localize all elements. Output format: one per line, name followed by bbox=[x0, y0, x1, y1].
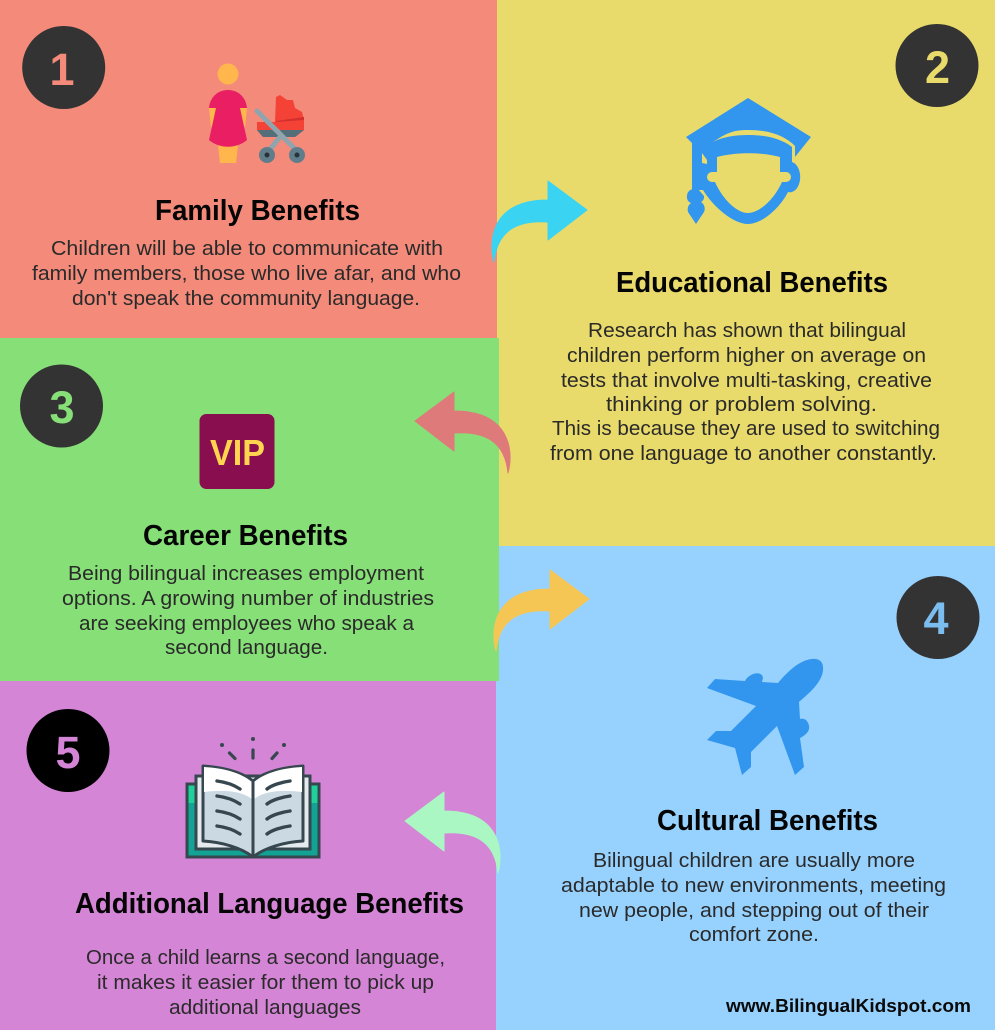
number badge 2: 2 bbox=[925, 42, 950, 93]
text: career benefits description: are seeking employees who speak a bbox=[79, 612, 415, 635]
icon: graduate head with cap bbox=[686, 98, 811, 224]
text: career benefits description: second language. bbox=[165, 636, 328, 659]
number badge 3 bbox=[20, 364, 103, 448]
heading: family benefits: Family Benefits bbox=[155, 195, 360, 227]
text: educational benefits description: tests that involve multi-tasking, creative bbox=[561, 369, 932, 392]
panel: career benefits content bbox=[20, 364, 434, 659]
number badge 3: 3 bbox=[49, 382, 75, 433]
text: additional language benefits description bbox=[86, 946, 445, 1019]
icon: VIP badge: VIP bbox=[210, 432, 265, 473]
arrow: cultural to additional language bbox=[405, 792, 500, 873]
panel: educational benefits content bbox=[550, 24, 978, 465]
text: career benefits description bbox=[62, 562, 434, 659]
text: educational benefits description: from one language to another constantly. bbox=[550, 442, 937, 465]
heading: career benefits: Career Benefits bbox=[143, 520, 348, 552]
text: educational benefits description: This is because they are used to switching bbox=[552, 417, 940, 440]
text: family benefits description: Children will be able to communicate with bbox=[51, 237, 443, 260]
panel: cultural benefits background bbox=[495, 546, 995, 1030]
arrow: educational to career bbox=[415, 392, 510, 473]
heading: educational benefits: Educational Benefits bbox=[616, 267, 888, 299]
text: family benefits description bbox=[32, 237, 461, 310]
heading: additional language benefits: Additional Language Benefits bbox=[75, 888, 464, 920]
number badge 5: 5 bbox=[55, 727, 81, 778]
panel: educational benefits background bbox=[497, 0, 995, 546]
text: cultural benefits description: comfort zone. bbox=[689, 923, 819, 946]
text: additional language benefits description: it makes it easier for them to pick up bbox=[97, 971, 434, 994]
text: family benefits description: family members, those who live afar, and who bbox=[32, 262, 461, 285]
number badge 5 bbox=[26, 709, 110, 792]
website credit: www.BilingualKidspot.com bbox=[725, 996, 971, 1016]
icon: open book bbox=[187, 737, 319, 857]
text: cultural benefits description: Bilingual children are usually more bbox=[593, 849, 915, 872]
heading: cultural benefits: Cultural Benefits bbox=[657, 805, 878, 837]
panel: family benefits content bbox=[22, 26, 461, 310]
panel: cultural benefits content bbox=[561, 576, 980, 1016]
number badge 2 bbox=[896, 24, 978, 107]
text: career benefits description: options. A growing number of industries bbox=[62, 587, 434, 610]
icon: mother and pram bbox=[209, 64, 305, 163]
arrow: career to cultural bbox=[494, 570, 589, 651]
text: cultural benefits description: adaptable to new environments, meeting bbox=[561, 874, 946, 897]
text: educational benefits description: Research has shown that bilingual bbox=[588, 319, 906, 342]
text: career benefits description: Being bilingual increases employment bbox=[68, 562, 424, 585]
number badge 1: 1 bbox=[49, 44, 75, 95]
text: educational benefits description: thinking or problem solving. bbox=[606, 393, 877, 416]
text: educational benefits description: children perform higher on average on bbox=[567, 344, 926, 367]
text: cultural benefits description: new people, and stepping out of their bbox=[579, 899, 929, 922]
arrow: family to educational bbox=[492, 181, 587, 262]
number badge 1 bbox=[22, 26, 105, 109]
text: educational benefits description bbox=[550, 319, 940, 465]
number badge 4 bbox=[896, 576, 980, 659]
text: cultural benefits description bbox=[561, 849, 946, 946]
panel: additional language benefits background bbox=[0, 681, 496, 1030]
icon: VIP badge bbox=[200, 414, 274, 489]
text: additional language benefits description: additional languages bbox=[169, 996, 361, 1019]
number badge 4: 4 bbox=[923, 593, 949, 644]
panel: additional language benefits content bbox=[26, 709, 464, 1019]
panel: family benefits background bbox=[0, 0, 497, 338]
icon: airplane bbox=[707, 659, 823, 775]
text: additional language benefits description: Once a child learns a second language, bbox=[86, 946, 445, 969]
text: family benefits description: don't speak the community language. bbox=[72, 287, 420, 310]
panel: career benefits background bbox=[0, 338, 499, 681]
